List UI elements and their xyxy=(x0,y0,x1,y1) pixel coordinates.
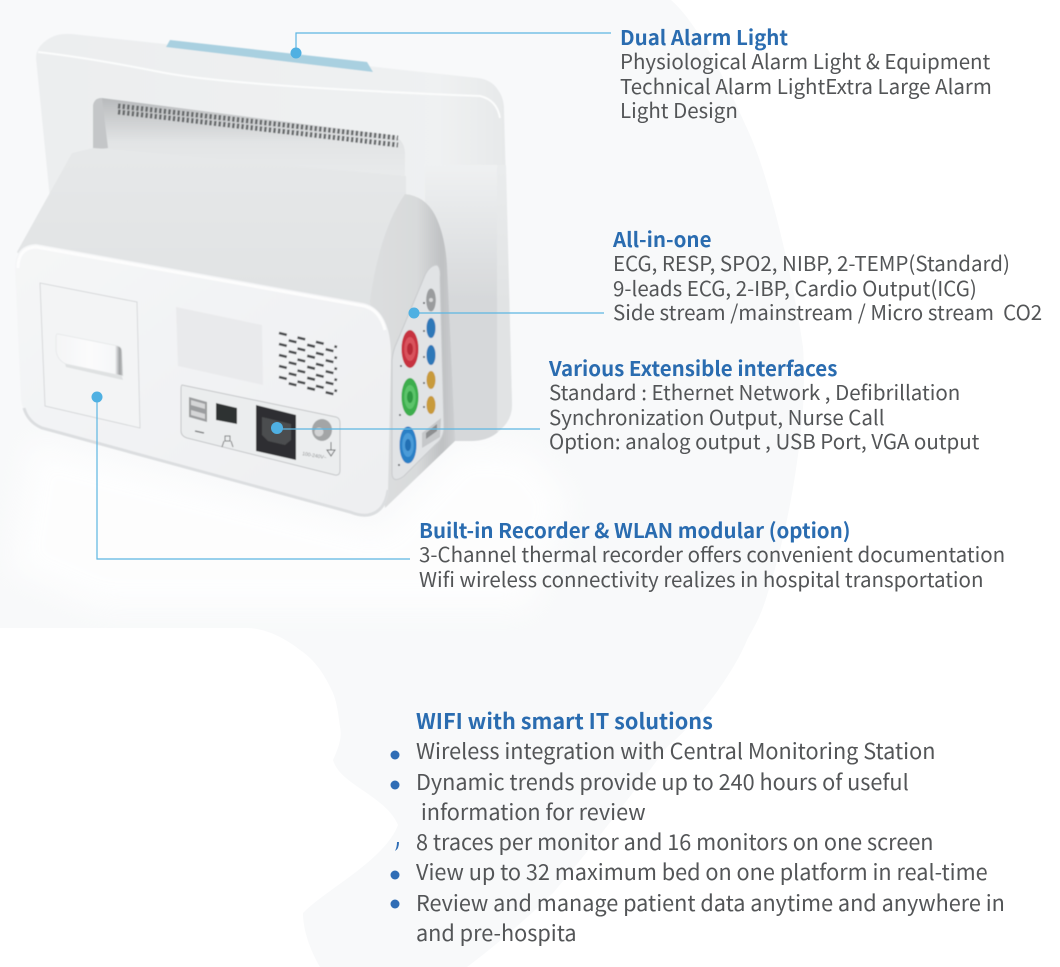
rear handle slot xyxy=(93,98,405,195)
text block: WIFI with smart IT solutions: information for review xyxy=(421,796,646,827)
callout: interfaces line xyxy=(271,422,540,434)
side of housing xyxy=(370,194,455,508)
slot side shadow xyxy=(93,98,108,150)
grey top of housing xyxy=(17,148,406,480)
text block: Built-in Recorder & WLAN: 3-Channel thermal recorder offers convenient documentation xyxy=(419,538,1005,568)
text block: WIFI with smart IT solutions: 8 traces per monitor and 16 monitors on one screen xyxy=(416,826,934,857)
label plate xyxy=(176,307,263,385)
front shell xyxy=(15,244,391,515)
network symbol xyxy=(222,436,233,447)
text block: Various Extensible interfaces: Various Extensible interfaces xyxy=(549,352,837,382)
side port panel xyxy=(392,265,444,480)
red sensor port xyxy=(402,330,418,368)
background: pale swoosh shape xyxy=(0,0,804,967)
right strip of the back housing xyxy=(497,165,512,432)
callout: all-in-one line xyxy=(408,308,604,318)
text block: Various Extensible interfaces: Option: analog output , USB Port, VGA output xyxy=(549,425,979,455)
text block: Dual Alarm Light: Technical Alarm LightExtra Large Alarm xyxy=(620,70,992,100)
text block: Dual Alarm Light: Physiological Alarm Light & Equipment xyxy=(620,45,990,75)
text block: WIFI with smart IT solutions: View up to 32 maximum bed on one platform in real-time xyxy=(416,856,988,887)
front shell bottom rim xyxy=(24,408,388,515)
text block: All-in-one: Side stream /mainstream / Micro stream CO2 xyxy=(613,296,1042,326)
ventilation slots xyxy=(118,106,398,145)
printer door xyxy=(40,283,140,428)
right grey face of the back housing xyxy=(425,165,498,441)
text block: All-in-one: ECG, RESP, SPO2, NIBP, 2-TEMP(Standard) xyxy=(613,247,1010,277)
green sensor port xyxy=(402,378,418,416)
text block: All-in-one: All-in-one xyxy=(613,223,711,253)
voltage label: 100-240V~ xyxy=(302,451,327,461)
speaker grille xyxy=(279,333,337,395)
ethernet port xyxy=(216,403,237,424)
text block: Various Extensible interfaces: Synchronization Output, Nurse Call xyxy=(549,401,885,431)
ground symbol and voltage mark xyxy=(327,442,335,456)
barcode plate xyxy=(422,418,441,448)
text block: WIFI with smart IT solutions: Review and manage patient data anytime and anywhere in xyxy=(416,887,1005,918)
USB symbol xyxy=(195,431,204,433)
blue sensor port xyxy=(400,426,416,464)
text block: Various Extensible interfaces: Standard : Ethernet Network , Defibrillation xyxy=(549,376,960,406)
text block: Dual Alarm Light: Dual Alarm Light xyxy=(620,21,788,51)
text block: WIFI with smart IT solutions: Wireless integration with Central Monitoring Station xyxy=(416,735,935,766)
text block: Built-in Recorder & WLAN: Built-in Recorder & WLAN modular (option) xyxy=(419,514,851,544)
ground terminal xyxy=(312,419,332,441)
power socket xyxy=(256,405,296,460)
text block: Built-in Recorder & WLAN: Wifi wireless connectivity realizes in hospital transportation xyxy=(419,563,984,593)
alarm light bar xyxy=(166,40,373,72)
floor highlight beneath the device xyxy=(10,440,570,610)
connector marker dots xyxy=(398,302,425,466)
orange side connectors xyxy=(426,371,436,414)
callout: alarm light line xyxy=(290,33,611,58)
text block: Dual Alarm Light xyxy=(620,21,992,124)
text block: WIFI with smart IT solutions: and pre-hospita xyxy=(416,917,577,948)
text block: WIFI with smart IT solutions xyxy=(416,705,1005,948)
monitor device xyxy=(15,34,512,515)
back housing of the monitor xyxy=(36,34,512,441)
text block: Various Extensible interfaces xyxy=(548,352,979,455)
text block: All-in-one: 9-leads ECG, 2-IBP, Cardio Output(ICG) xyxy=(613,272,977,302)
text block: WIFI with smart IT solutions: WIFI with smart IT solutions xyxy=(416,705,713,736)
printer handle xyxy=(56,334,123,380)
grey side connector xyxy=(426,288,436,312)
text block: All-in-one xyxy=(612,223,1042,326)
text block: Dual Alarm Light: Light Design xyxy=(620,94,738,124)
front shell rim highlight xyxy=(18,247,385,330)
USB ports xyxy=(189,397,207,422)
text block: WIFI with smart IT solutions: Dynamic trends provide up to 240 hours of useful xyxy=(416,766,909,797)
text block: Built-in Recorder & WLAN xyxy=(419,514,1005,593)
upper edge highlight xyxy=(38,52,500,118)
blue side connectors xyxy=(426,318,436,365)
callout: recorder line xyxy=(92,392,410,559)
connector panel xyxy=(181,385,340,475)
bullet markers xyxy=(390,750,400,908)
